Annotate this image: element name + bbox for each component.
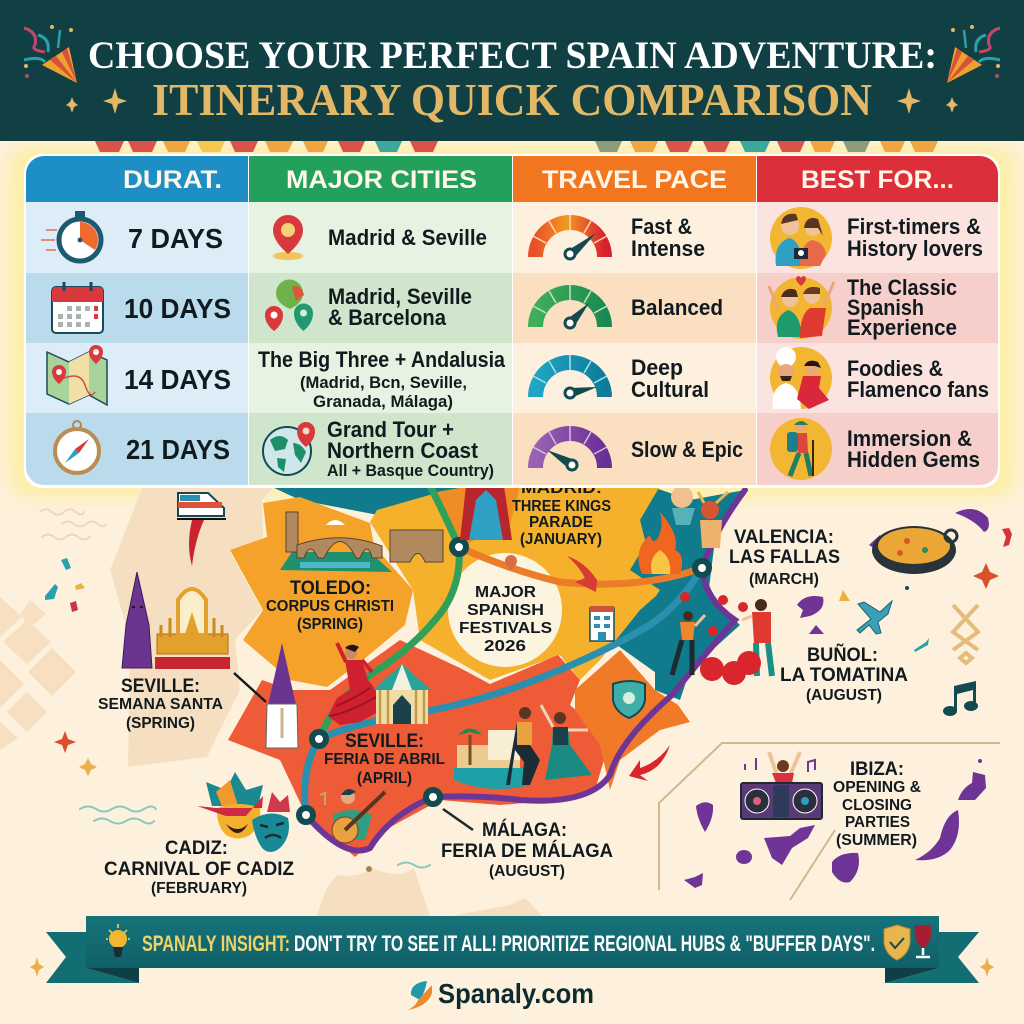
icon: dancers [506,705,592,785]
pace text: Intense [631,236,705,261]
route stops [299,540,709,822]
icon: wine glass [915,925,931,957]
icon: music note [943,681,978,716]
ribbon tails [46,932,979,983]
label: madrid three kings: (JANUARY) [520,531,602,548]
label: ibiza: IBIZA: [850,759,904,780]
gibraltar dot [366,866,372,872]
cities text: Granada, Málaga) [313,392,453,411]
region: valencia teal bulge [630,530,740,700]
icon: pin [273,215,303,260]
icon: couple with camera [770,207,832,269]
icon: right party popper [947,25,1000,83]
icon: three pins [265,280,313,331]
label: toledo: TOLEDO: [290,578,371,599]
audience text: Immersion & [847,426,972,451]
portugal land [110,486,275,767]
days labels: 14 DAYS [124,364,231,395]
icon: guitar player [320,789,385,843]
region: murcia orange [575,650,690,790]
bunting [95,141,938,152]
icon: madrid figure [460,486,512,540]
label: cadiz: CARNIVAL OF CADIZ [104,859,294,880]
label: seville semana santa: SEVILLE: [121,676,200,697]
label: seville feria de abril: (APRIL) [357,770,412,787]
label: seville semana santa [98,676,223,732]
heading: durat: DURAT. [123,166,222,194]
title line 2: ITINERARY QUICK COMPARISON [152,74,872,125]
icon: madrid figure robe [469,490,503,540]
icon: paella [869,526,957,574]
label: malaga: FERIA DE MÁLAGA [441,840,613,862]
canary islands [684,759,986,888]
icon: white nazareno [234,643,298,748]
heading: major cities: MAJOR CITIES [286,166,477,194]
label: seville feria de abril: FERIA DE ABRIL [324,751,445,768]
label: toledo [266,578,394,633]
label: seville semana santa: (SPRING) [126,715,195,732]
header band [0,0,1024,141]
label: major spanish festivals [459,584,552,655]
white festival circle [448,553,562,667]
label: madrid three kings: PARADE [529,514,593,531]
icon: fire [638,512,682,574]
icon: stopwatch [41,211,101,261]
icon: dj deck [741,752,822,819]
icon: hiker [770,418,832,480]
icon: cheering couple [769,276,834,339]
label: ibiza: (SUMMER) [836,832,917,849]
spain map [228,486,745,857]
label: major spanish festivals: 2026 [484,638,526,655]
label: bunol [780,644,908,704]
region: toledo orange [230,497,413,687]
label: seville feria de abril: SEVILLE: [345,731,424,752]
label: malaga [441,819,613,880]
icon: town and sea [454,728,530,789]
label: seville semana santa: SEMANA SANTA [98,696,223,713]
label: bunol: (AUGUST) [806,687,882,704]
label: bunol: BUÑOL: [807,644,878,666]
pace text [631,214,743,462]
label: ibiza: PARTIES [845,814,910,831]
label: ibiza: CLOSING [842,797,912,814]
comparison table [24,154,1000,488]
title line 1: CHOOSE YOUR PERFECT SPAIN ADVENTURE: [88,34,937,77]
icon: small location pin [505,555,517,571]
icon: hotel [590,606,614,641]
decorative diamond pattern [0,597,76,750]
arrow: to hotel [567,556,597,592]
label: bunol: LA TOMATINA [780,665,908,686]
cities text: (Madrid, Bcn, Seville, [300,373,467,392]
days labels: 10 DAYS [124,293,231,324]
audience text: History lovers [847,236,983,261]
ribbon body [86,916,939,968]
label: valencia [729,527,840,588]
label: cadiz [104,838,294,897]
audience text: Flamenco fans [847,377,989,402]
icon: toledo bridge [280,512,443,572]
label: major spanish festivals: SPANISH [467,602,544,619]
icon: light bulb [106,924,130,957]
label: madrid three kings: MADRID: [521,480,602,497]
label: major spanish festivals: FESTIVALS [459,620,552,637]
label: ibiza [833,759,921,849]
icon: flamenco dancer [328,643,386,725]
logo text: Spanaly.com [438,978,594,1009]
insight label: SPANALY INSIGHT: [142,931,290,956]
gauge: slow [533,426,607,470]
route lines [305,486,745,851]
table glow [8,146,1016,498]
cities text [258,225,506,480]
region: north teal [270,486,745,690]
pace text: Cultural [631,377,709,402]
column: major cities [249,156,512,485]
icon: train [177,493,226,566]
label: cadiz: (FEBRUARY) [151,880,247,897]
days labels: 21 DAYS [126,434,230,465]
cities text: The Big Three + Andalusia [258,347,506,372]
column: duration [26,156,248,485]
icon: carnival masks [197,772,290,852]
ribbon folds [86,968,939,983]
cities text: Grand Tour + [327,417,454,442]
morocco land [317,868,542,916]
title sparkles [66,88,958,114]
label: valencia: LAS FALLAS [729,547,840,568]
map labels [98,480,921,897]
icon: tomato thrower left [672,611,705,675]
icon: plane [857,601,892,634]
pace text: Deep [631,355,683,380]
icon: tomatoes [680,592,761,685]
insight ribbon [46,916,979,983]
audience text: Hidden Gems [847,447,980,472]
gauge: balanced [533,285,607,328]
icon: fallas figures [671,486,728,548]
label: toledo: (SPRING) [297,616,363,633]
days labels: 7 DAYS [128,223,223,254]
audience text: First-timers & [847,214,981,239]
heading: best for: BEST FOR... [801,166,954,194]
icon: left party popper [24,25,77,83]
region: madrid darker orange [437,486,520,547]
label: seville feria de abril [324,731,445,787]
cities text: All + Basque Country) [327,461,494,480]
label: major spanish festivals: MAJOR [475,584,536,601]
icon: shield check [884,925,910,960]
pace text: Slow & Epic [631,437,743,462]
audience text [847,214,989,472]
arrow: red curved [629,745,670,781]
icon: gold knot decoration [953,605,978,663]
decor: sparkles and confetti [30,528,1012,977]
region: amber centre [370,486,680,680]
icon: calendar [52,282,103,333]
logo mark [408,981,432,1010]
icon: fair tent [373,664,431,724]
icon: tomato thrower right [742,599,772,676]
pace text: Balanced [631,295,723,320]
cities text: Madrid & Seville [328,225,487,250]
label: madrid three kings: THREE KINGS [512,498,611,515]
label: cadiz: CADIZ: [165,838,228,859]
days labels [124,223,231,465]
audience text: The Classic [847,275,957,300]
gauge: deep [533,355,607,398]
region: andalusia red [228,640,610,857]
pointer: malaga [443,809,473,830]
label: malaga: MÁLAGA: [482,819,567,841]
icon: chef and flamenco dancer [770,347,832,409]
label: malaga: (AUGUST) [489,863,565,880]
wave decorations [40,510,430,868]
icon: penitent and paso [122,572,230,669]
audience text: Foodies & [847,356,943,381]
icon: compass [55,421,99,473]
column: travel pace [513,156,756,485]
label: toledo: CORPUS CHRISTI [266,598,394,615]
table frame [24,154,1000,488]
label: ibiza: OPENING & [833,779,921,796]
canary frame line [659,743,1000,900]
pace text: Fast & [631,214,692,239]
heading: travel pace: TRAVEL PACE [542,166,727,194]
label: madrid three kings [512,480,611,548]
audience text: Spanish [847,295,924,320]
audience text: Experience [847,315,957,340]
icon: shield [613,681,645,718]
icon: globe [263,422,315,475]
label: valencia: (MARCH) [749,571,819,588]
cities text: Northern Coast [327,438,479,463]
balearic islands [797,509,989,634]
column: best for [757,156,998,485]
icon: folded map [47,345,107,405]
cities text: & Barcelona [328,305,447,330]
label: valencia: VALENCIA: [734,527,834,548]
cities text: Madrid, Seville [328,284,472,309]
gauge: fast [533,215,607,259]
